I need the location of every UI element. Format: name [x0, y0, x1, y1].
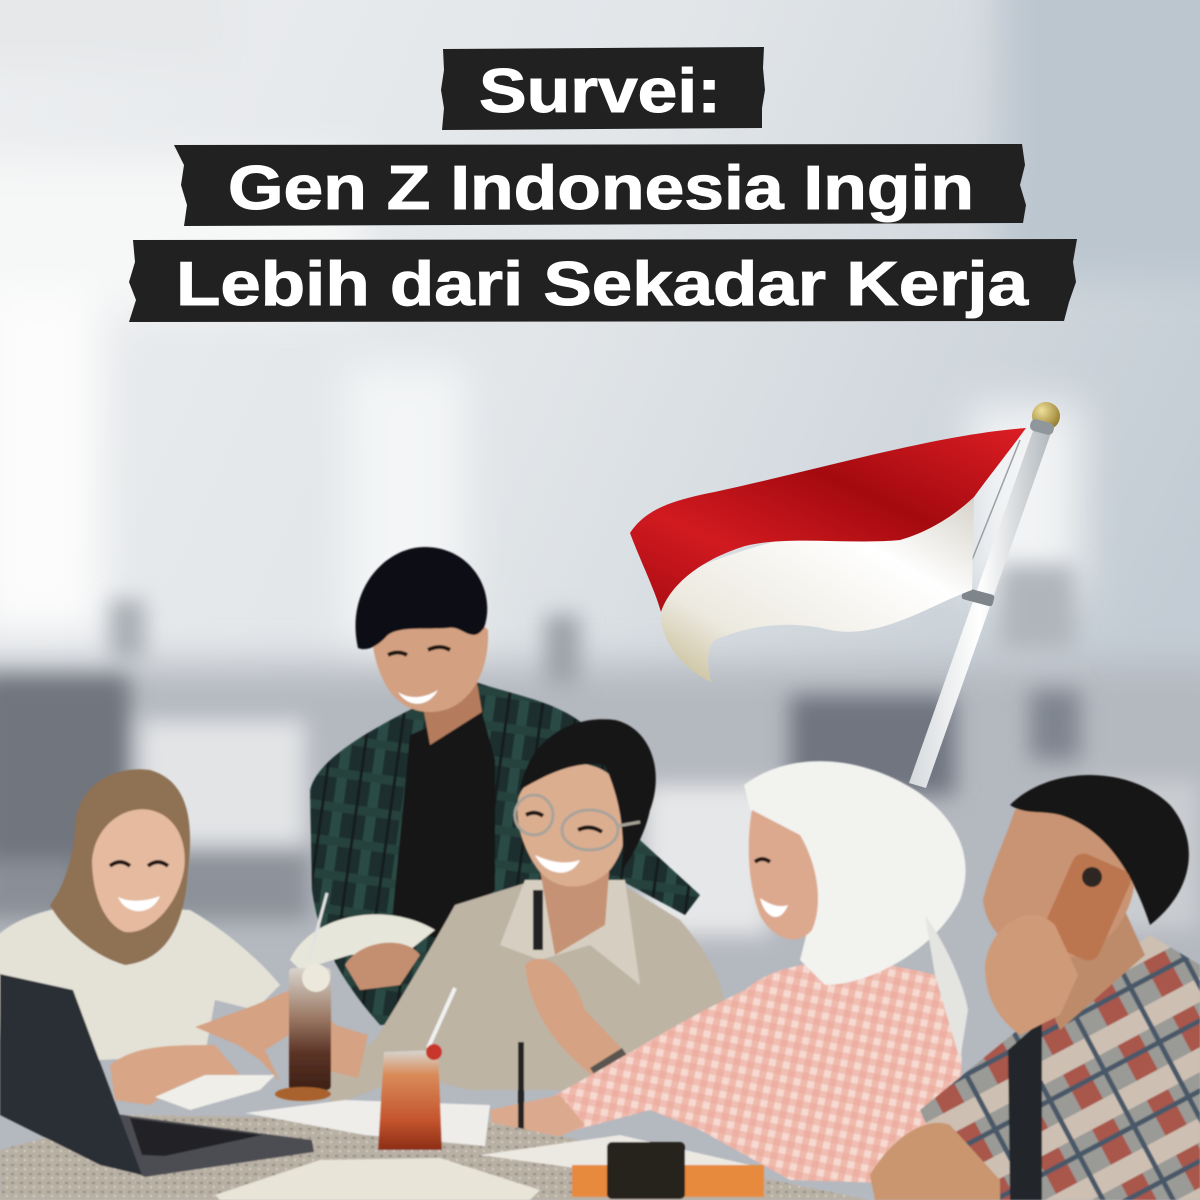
white hijab	[744, 761, 966, 985]
neck	[540, 860, 610, 955]
hand on book	[110, 1045, 240, 1105]
title: three torn-tape label strips	[129, 47, 1077, 322]
hair	[520, 719, 656, 870]
hand and arm	[985, 915, 1078, 1035]
flag white band	[661, 497, 974, 682]
hijab	[50, 769, 190, 965]
person: woman with glasses, centre	[195, 719, 725, 1105]
phone	[1038, 850, 1134, 964]
notebook, right	[480, 1135, 750, 1170]
neck	[420, 670, 482, 745]
laptop base	[100, 1112, 314, 1177]
hand with pen	[525, 959, 625, 1078]
face	[749, 810, 818, 939]
gingham blouse	[555, 962, 962, 1185]
forearm	[870, 1123, 1000, 1200]
laptop screen	[0, 974, 142, 1175]
smile	[118, 896, 160, 911]
hair	[356, 547, 487, 649]
title line: Lebih dari Sekadar Kerja: Lebih dari Sekadar Kerja	[176, 250, 1029, 319]
notebook	[245, 1100, 490, 1146]
dark undershirt	[1008, 1020, 1042, 1200]
straw	[309, 893, 327, 960]
person: woman in tan hijab, left	[0, 769, 280, 1105]
table with books and drinks	[0, 893, 870, 1200]
flag pole with gold finial	[909, 402, 1060, 788]
hand	[490, 1095, 585, 1150]
people group	[0, 547, 1200, 1200]
iced coffee glass	[289, 968, 331, 1090]
strawberry garnish	[426, 1044, 442, 1060]
red drink glass	[378, 1050, 442, 1150]
laptop	[0, 974, 314, 1177]
hand holding book	[345, 943, 420, 990]
title line: Gen Z Indonesia Ingin: Gen Z Indonesia Ingin	[228, 154, 974, 223]
black tee	[392, 705, 495, 940]
person: standing man in plaid shirt	[310, 547, 700, 1025]
table top	[0, 1115, 870, 1200]
coffee cup	[607, 1142, 685, 1199]
open book, left	[155, 1075, 275, 1110]
plaid shirt	[920, 935, 1200, 1200]
pointing arm	[195, 990, 368, 1082]
eyes	[388, 647, 450, 655]
title line: Survei: Survei:	[479, 57, 721, 126]
collar	[500, 880, 640, 985]
face	[517, 764, 627, 886]
Indonesian flag	[630, 428, 1026, 682]
smile	[398, 690, 438, 704]
open book, bottom	[215, 1158, 540, 1200]
wrist watch	[590, 1048, 630, 1080]
orange book	[572, 1165, 764, 1197]
glasses	[515, 795, 640, 850]
plaid shirt	[310, 680, 700, 1025]
face	[372, 616, 488, 712]
open book held by man	[290, 914, 435, 970]
face	[983, 803, 1135, 960]
beige shirt	[315, 880, 725, 1105]
eyes	[110, 862, 168, 866]
flag red band	[630, 428, 1026, 612]
smile	[535, 855, 580, 873]
title line: Lebih dari Sekadar Kerja	[129, 239, 1077, 322]
title line: Survei	[441, 47, 765, 130]
smile	[760, 898, 788, 917]
hair	[1010, 775, 1189, 925]
person: woman in white hijab, pink gingham	[490, 761, 968, 1185]
title line: Gen Z Indonesia Ingin	[174, 144, 1026, 226]
eyes	[526, 813, 602, 832]
eyes	[755, 859, 770, 862]
face	[92, 809, 185, 932]
neck	[1030, 900, 1145, 1030]
drink straw	[428, 988, 455, 1048]
cream blouse	[0, 905, 280, 1060]
person: man with phone, right	[870, 775, 1200, 1200]
